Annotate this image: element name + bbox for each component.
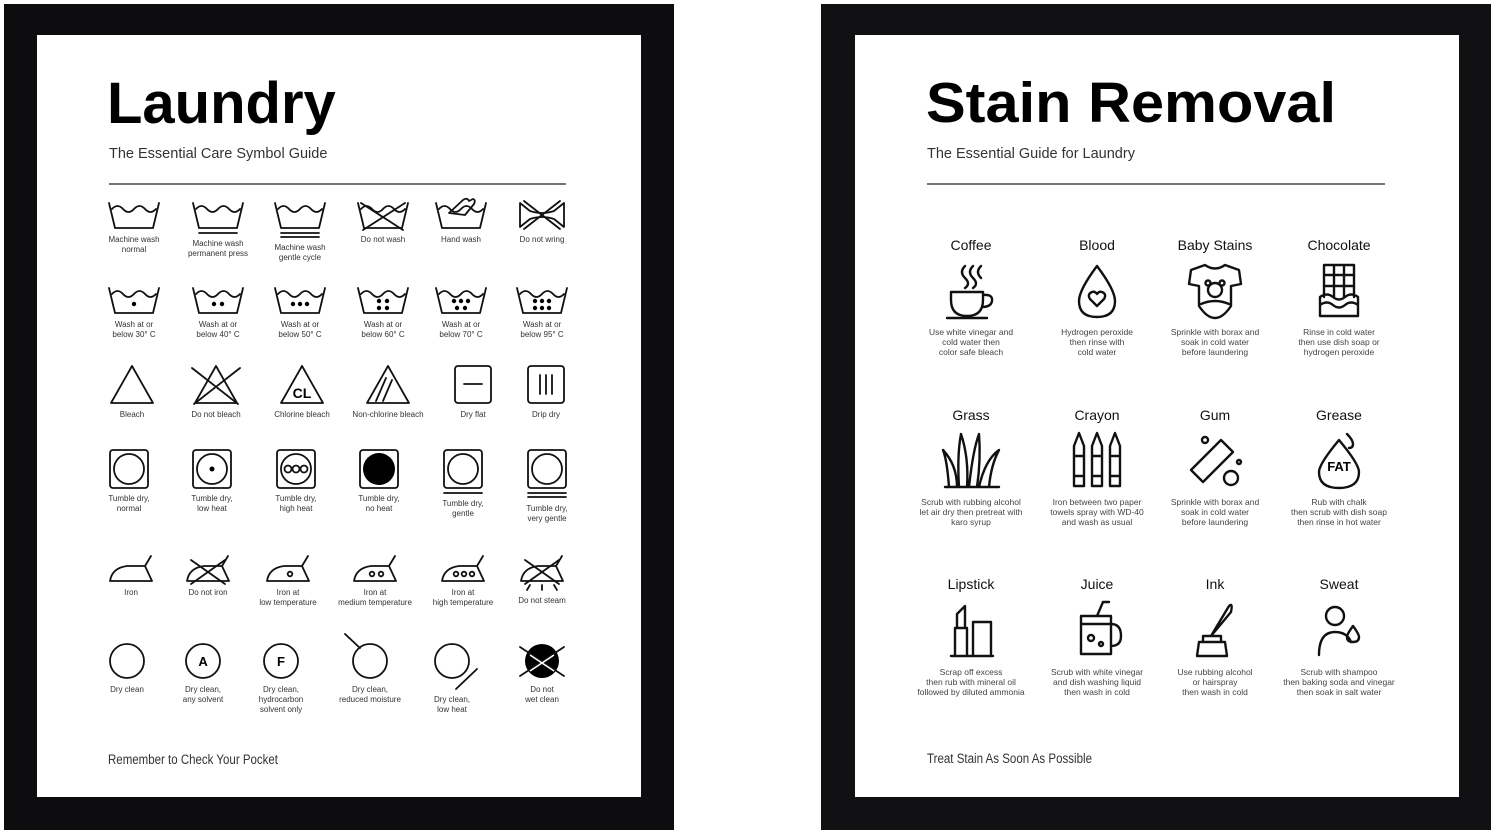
item: sweat: then baking soda and vinegar [1283, 677, 1395, 687]
icon: do not wet clean [520, 644, 564, 704]
item: lipstick [917, 576, 1025, 697]
item: crayon: Iron between two paper [1053, 497, 1142, 507]
row 2: wash temperatures [109, 288, 567, 339]
item: lipstick: followed by diluted ammonia [917, 687, 1025, 697]
icon: non-chlorine bleach: Non-chlorine bleach [352, 410, 424, 419]
icon: 70C: below 70° C [439, 330, 483, 339]
item: grease [1291, 407, 1387, 527]
icon: dry clean hydrocarbon [259, 644, 303, 714]
icon: chlorine bleach: CL [293, 385, 312, 401]
item: baby stains [1171, 237, 1259, 357]
icon: do not wet clean: wet clean [524, 695, 559, 704]
icon: do not iron: Do not iron [188, 588, 228, 597]
item: crayon [1050, 407, 1144, 527]
icon: dry clean any solvent: A [198, 654, 208, 669]
subtitle: laundry: The Essential Care Symbol Guide [109, 146, 327, 162]
icon: 70C [436, 288, 486, 339]
icon: 50C: below 50° C [278, 330, 322, 339]
icon: dry flat [455, 366, 491, 419]
icon: 95C: below 95° C [520, 330, 564, 339]
icon: 30C [109, 288, 159, 339]
icon: do not bleach: Do not bleach [191, 410, 241, 419]
item: crayon: and wash as usual [1062, 517, 1132, 527]
item: gum: before laundering [1182, 517, 1248, 527]
stain row 3 [917, 576, 1395, 697]
icon: 40C: below 40° C [196, 330, 240, 339]
icon: iron high: Iron at [452, 588, 475, 597]
icon: tumble dry no heat: no heat [366, 504, 393, 513]
item: grease: Grease [1316, 407, 1362, 423]
icon: iron low: Iron at [277, 588, 300, 597]
subtitle: stain: The Essential Guide for Laundry [927, 146, 1136, 162]
icon: non-chlorine bleach [352, 366, 424, 419]
item: chocolate: then use dish soap or [1298, 337, 1380, 347]
item: blood: cold water [1078, 347, 1117, 357]
icon: machine wash normal [108, 203, 160, 254]
item: grease: then rinse in hot water [1297, 517, 1381, 527]
item: crayon: Crayon [1074, 407, 1120, 423]
icon: 60C: below 60° C [361, 330, 405, 339]
icon: iron medium: Iron at [364, 588, 387, 597]
item: sweat [1283, 576, 1395, 697]
icon: do not steam [518, 556, 566, 605]
icon: tumble dry very gentle [526, 450, 568, 523]
stain row 2 [920, 407, 1387, 527]
icon: machine wash permanent press: permanent press [188, 249, 248, 258]
item: sweat: then soak in salt water [1297, 687, 1381, 697]
icon: tumble dry very gentle: very gentle [527, 514, 567, 523]
icon: dry clean [110, 644, 144, 694]
icon: do not wring: Do not wring [520, 235, 564, 244]
icon: 50C [275, 288, 325, 339]
icon: dry clean hydrocarbon: F [277, 654, 285, 669]
icon: tumble dry no heat: Tumble dry, [358, 494, 400, 503]
icon: tumble dry normal [108, 450, 150, 513]
footer: stain: Treat Stain As Soon As Possible [927, 751, 1092, 766]
item: juice [1051, 576, 1143, 697]
icon: 40C [193, 288, 243, 339]
icon: iron medium [338, 556, 412, 607]
stain row 1 [929, 237, 1380, 357]
item: coffee: color safe bleach [939, 347, 1003, 357]
icon: tumble dry normal: Tumble dry, [108, 494, 150, 503]
item: grass [920, 407, 1023, 527]
item: sweat: Sweat [1320, 576, 1359, 592]
item: lipstick: Scrap off excess [940, 667, 1002, 677]
item: crayon: towels spray with WD-40 [1050, 507, 1144, 517]
icon: tumble dry high: Tumble dry, [275, 494, 317, 503]
item: baby stains: soak in cold water [1181, 337, 1249, 347]
icon: dry clean hydrocarbon: solvent only [260, 705, 302, 714]
icon: dry clean low heat: low heat [437, 705, 468, 714]
icon: iron low [259, 556, 317, 607]
item: chocolate: Rinse in cold water [1303, 327, 1375, 337]
icon: 70C: Wash at or [442, 320, 481, 329]
item: gum: Sprinkle with borax and [1171, 497, 1259, 507]
icon: do not wash [358, 203, 408, 244]
icon: machine wash normal: Machine wash [108, 235, 160, 244]
icon: do not bleach [191, 366, 241, 419]
item: ink: or hairspray [1193, 677, 1238, 687]
item: baby stains: Sprinkle with borax and [1171, 327, 1259, 337]
icon: hand wash: Hand wash [441, 235, 481, 244]
icon: machine wash permanent press [188, 203, 248, 258]
icon: drip dry [528, 366, 564, 419]
item: gum [1171, 407, 1259, 527]
icon: iron low: low temperature [259, 598, 317, 607]
icon: drip dry: Drip dry [532, 410, 560, 419]
item: grass: karo syrup [951, 517, 991, 527]
row 3: bleach and dry [111, 366, 564, 419]
item: ink: Use rubbing alcohol [1177, 667, 1253, 677]
item: juice: Scrub with white vinegar [1051, 667, 1143, 677]
icon: dry flat: Dry flat [460, 410, 486, 419]
icon: tumble dry gentle: Tumble dry, [442, 499, 484, 508]
icon: dry clean reduced moisture [339, 634, 401, 704]
icon: 60C: Wash at or [364, 320, 403, 329]
item: coffee: Use white vinegar and [929, 327, 1013, 337]
row 4: tumble dry [108, 450, 568, 523]
item: juice: then wash in cold [1064, 687, 1130, 697]
icon: 30C: Wash at or [115, 320, 154, 329]
icon: tumble dry high [275, 450, 317, 513]
icon: dry clean low heat [434, 644, 477, 714]
icon: do not iron [187, 556, 229, 597]
item: coffee [929, 237, 1013, 357]
item: lipstick: then rub with mineral oil [926, 677, 1016, 687]
icon: dry clean hydrocarbon: Dry clean, [263, 685, 299, 694]
item: grass: Scrub with rubbing alcohol [921, 497, 1021, 507]
icon: tumble dry gentle: gentle [452, 509, 474, 518]
footer: laundry: Remember to Check Your Pocket [108, 752, 278, 767]
icon: do not wash: Do not wash [361, 235, 405, 244]
item: blood: Hydrogen peroxide [1061, 327, 1133, 337]
icon: iron [110, 556, 152, 597]
icon: dry clean low heat: Dry clean, [434, 695, 470, 704]
icon: tumble dry very gentle: Tumble dry, [526, 504, 568, 513]
icon: dry clean reduced moisture: Dry clean, [352, 685, 388, 694]
item: chocolate [1298, 237, 1380, 357]
item: blood: Blood [1079, 237, 1115, 253]
icon: tumble dry high: high heat [280, 504, 313, 513]
item: sweat: Scrub with shampoo [1300, 667, 1378, 677]
frame: laundry poster [4, 4, 674, 830]
icon: tumble dry no heat [358, 450, 400, 513]
title: Laundry: Laundry [107, 71, 336, 136]
icon: bleach: Bleach [120, 410, 144, 419]
item: grease: FAT [1327, 459, 1351, 474]
item: juice: and dish washing liquid [1053, 677, 1141, 687]
icon: dry clean hydrocarbon: hydrocarbon [259, 695, 303, 704]
item: ink: Ink [1206, 576, 1225, 592]
icon: 95C [517, 288, 567, 339]
icon: chlorine bleach [274, 366, 330, 419]
icon: do not steam: Do not steam [518, 596, 566, 605]
icon: dry clean reduced moisture: reduced moisture [339, 695, 401, 704]
item: ink: then wash in cold [1182, 687, 1248, 697]
icon: dry clean any solvent: Dry clean, [185, 685, 221, 694]
icon: do not wet clean: Do not [530, 685, 555, 694]
icon: hand wash [436, 199, 486, 244]
icon: 50C: Wash at or [281, 320, 320, 329]
row 5: ironing [110, 556, 566, 607]
item: grass: Grass [952, 407, 990, 423]
icon: machine wash permanent press: Machine wash [192, 239, 244, 248]
icon: tumble dry low: Tumble dry, [191, 494, 233, 503]
icon: 30C: below 30° C [112, 330, 156, 339]
item: gum: soak in cold water [1181, 507, 1249, 517]
icon: dry clean: Dry clean [110, 685, 144, 694]
item: baby stains: before laundering [1182, 347, 1248, 357]
icon: 95C: Wash at or [523, 320, 562, 329]
icon: 40C: Wash at or [199, 320, 238, 329]
icon: iron high [433, 556, 494, 607]
item: chocolate: Chocolate [1307, 237, 1371, 253]
icon: machine wash gentle: Machine wash [274, 243, 326, 252]
item: blood [1061, 237, 1133, 357]
item: ink [1177, 576, 1253, 697]
icon: iron medium: medium temperature [338, 598, 412, 607]
row 6: dry clean [110, 634, 564, 714]
frame: stain removal poster [821, 4, 1491, 830]
icon: iron: Iron [124, 588, 138, 597]
icon: bleach [111, 366, 153, 419]
item: grease: then scrub with dish soap [1291, 507, 1387, 517]
item: baby stains: Baby Stains [1178, 237, 1252, 253]
icon: tumble dry normal: normal [117, 504, 141, 513]
item: juice: Juice [1081, 576, 1114, 592]
icon: dry clean any solvent: any solvent [183, 695, 224, 704]
icon: machine wash normal: normal [122, 245, 146, 254]
item: grease: Rub with chalk [1311, 497, 1367, 507]
icon: machine wash gentle: gentle cycle [279, 253, 322, 262]
title: Stain Removal: Stain Removal [926, 71, 1336, 135]
item: grass: let air dry then pretreat with [920, 507, 1023, 517]
icon: do not wring [520, 201, 564, 244]
icon: machine wash gentle [274, 203, 326, 262]
icon: iron high: high temperature [433, 598, 494, 607]
item: coffee: Coffee [950, 237, 992, 253]
icon: tumble dry gentle [442, 450, 484, 518]
icon: tumble dry low [191, 450, 233, 513]
row 1: wash tubs [108, 199, 564, 262]
item: lipstick: Lipstick [948, 576, 995, 592]
icon: dry clean any solvent [183, 644, 224, 704]
icon: chlorine bleach: Chlorine bleach [274, 410, 330, 419]
item: coffee: cold water then [942, 337, 1000, 347]
item: gum: Gum [1200, 407, 1230, 423]
item: blood: then rinse with [1070, 337, 1125, 347]
icon: tumble dry low: low heat [197, 504, 228, 513]
icon: 60C [358, 288, 408, 339]
item: chocolate: hydrogen peroxide [1304, 347, 1374, 357]
